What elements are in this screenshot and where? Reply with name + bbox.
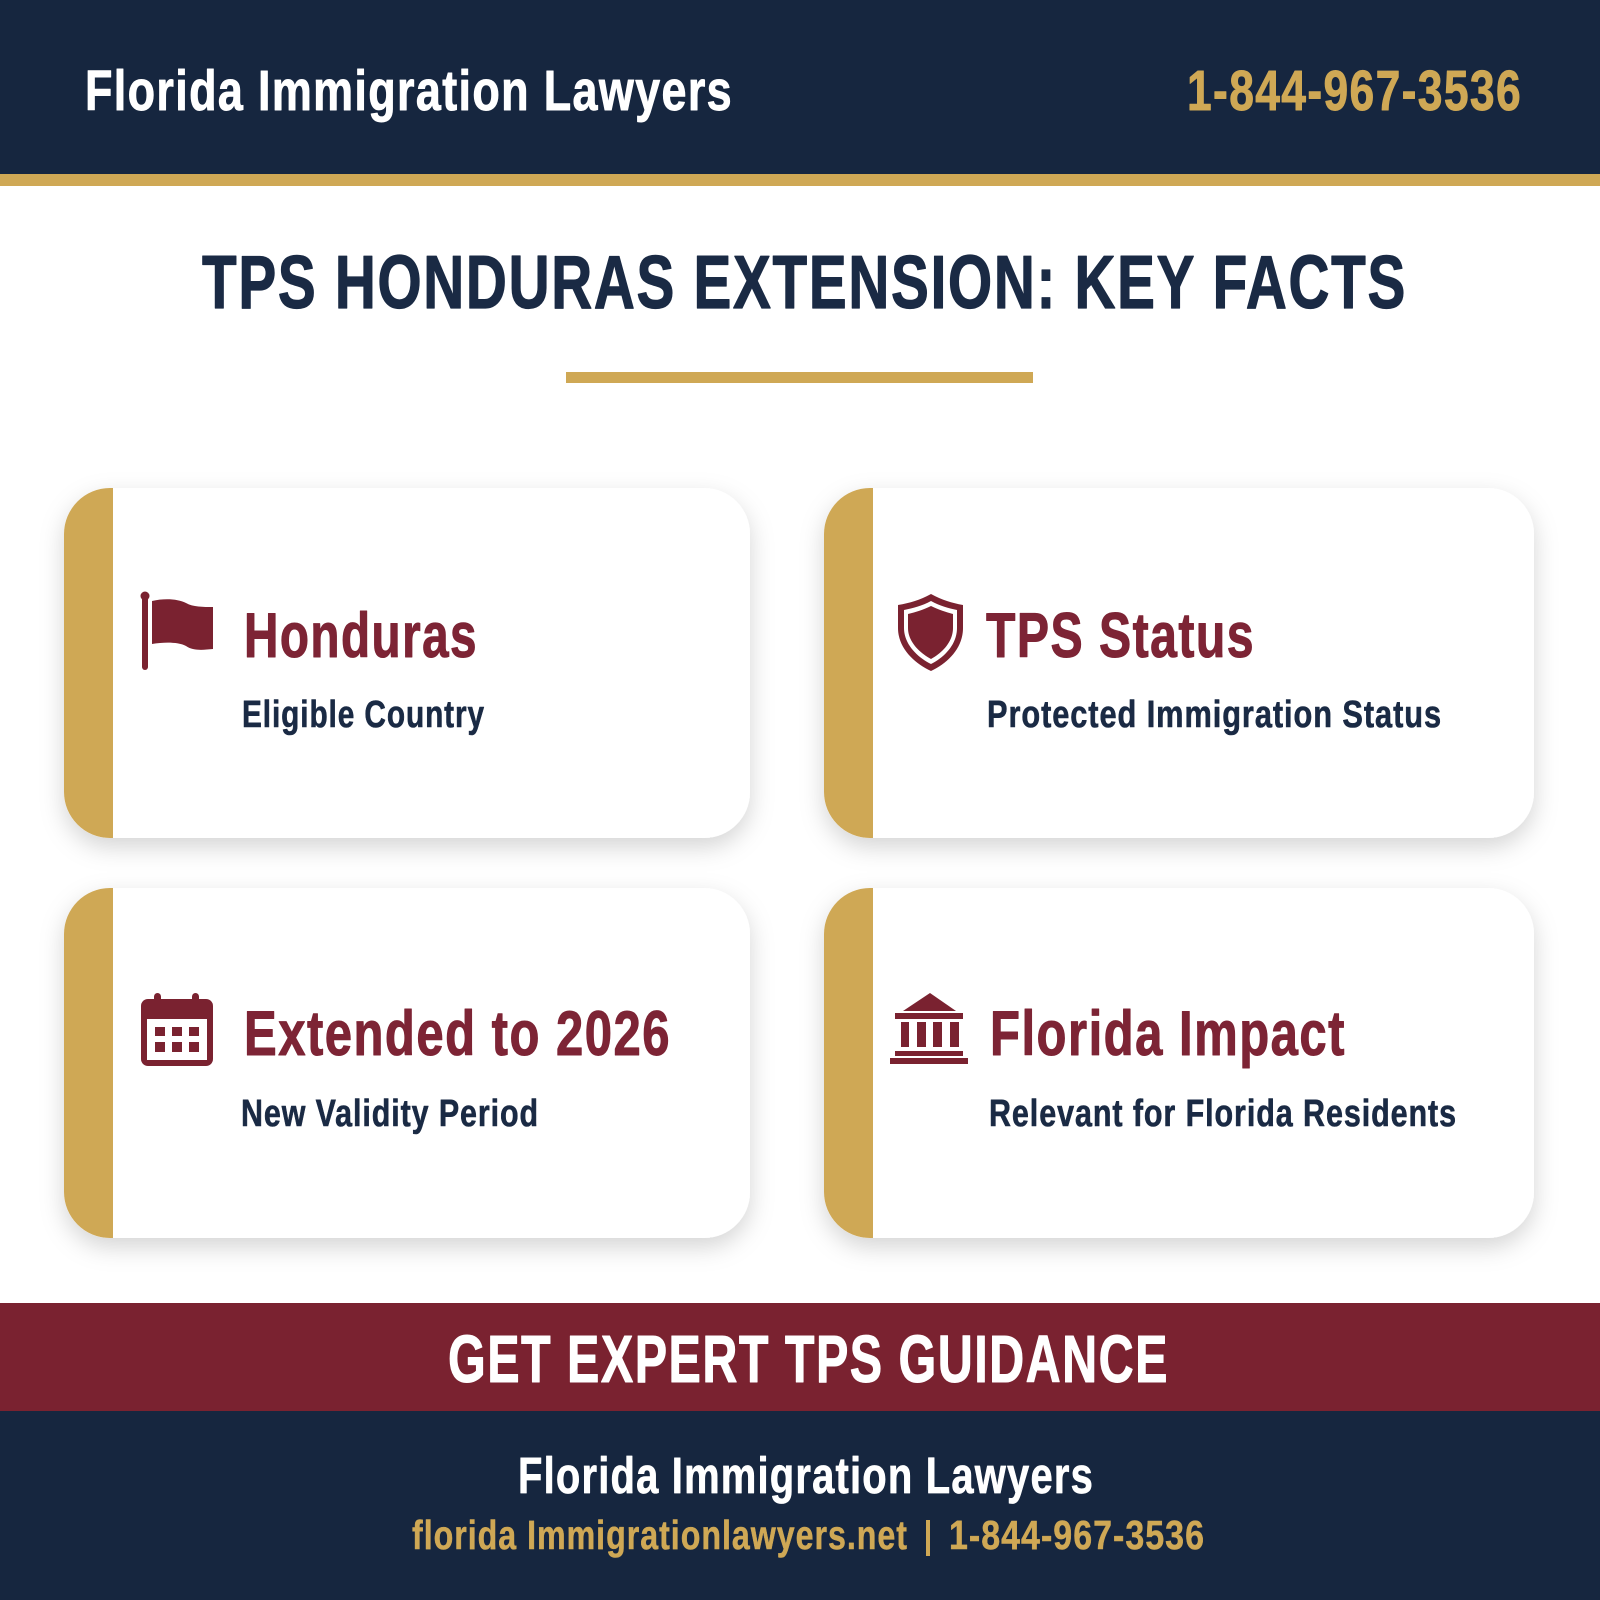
footer phone number: 1-844-967-3536	[949, 1512, 1205, 1558]
footer firm name: Florida Immigration Lawyers	[518, 1447, 1094, 1504]
Honduras heading: Honduras	[244, 601, 478, 671]
header band	[0, 0, 1600, 186]
call to action band	[0, 1303, 1600, 1411]
panel: TPS Status	[824, 488, 1534, 838]
panel: Extended to 2026	[64, 888, 750, 1238]
Honduras description: Eligible Country	[242, 694, 485, 736]
icon: flag	[140, 592, 213, 670]
Florida Impact heading: Florida Impact	[990, 999, 1346, 1069]
icon: shield	[898, 594, 963, 671]
footer band	[0, 1411, 1600, 1600]
icon: calendar	[141, 993, 213, 1066]
panel: Honduras	[64, 488, 750, 838]
footer separator	[926, 1520, 930, 1556]
icon: courthouse	[890, 993, 968, 1064]
footer website: florida Immigrationlawyers.net	[412, 1512, 908, 1558]
title underline	[566, 372, 1033, 383]
header firm name: Florida Immigration Lawyers	[85, 59, 733, 123]
TPS Status description: Protected Immigration Status	[987, 694, 1442, 736]
Extended to 2026 heading: Extended to 2026	[244, 999, 671, 1069]
panel: Florida Impact	[824, 888, 1534, 1238]
Extended to 2026 description: New Validity Period	[241, 1093, 539, 1135]
call to action text: GET EXPERT TPS GUIDANCE	[448, 1322, 1169, 1397]
Florida Impact description: Relevant for Florida Residents	[989, 1093, 1457, 1135]
TPS Status heading: TPS Status	[986, 601, 1255, 671]
